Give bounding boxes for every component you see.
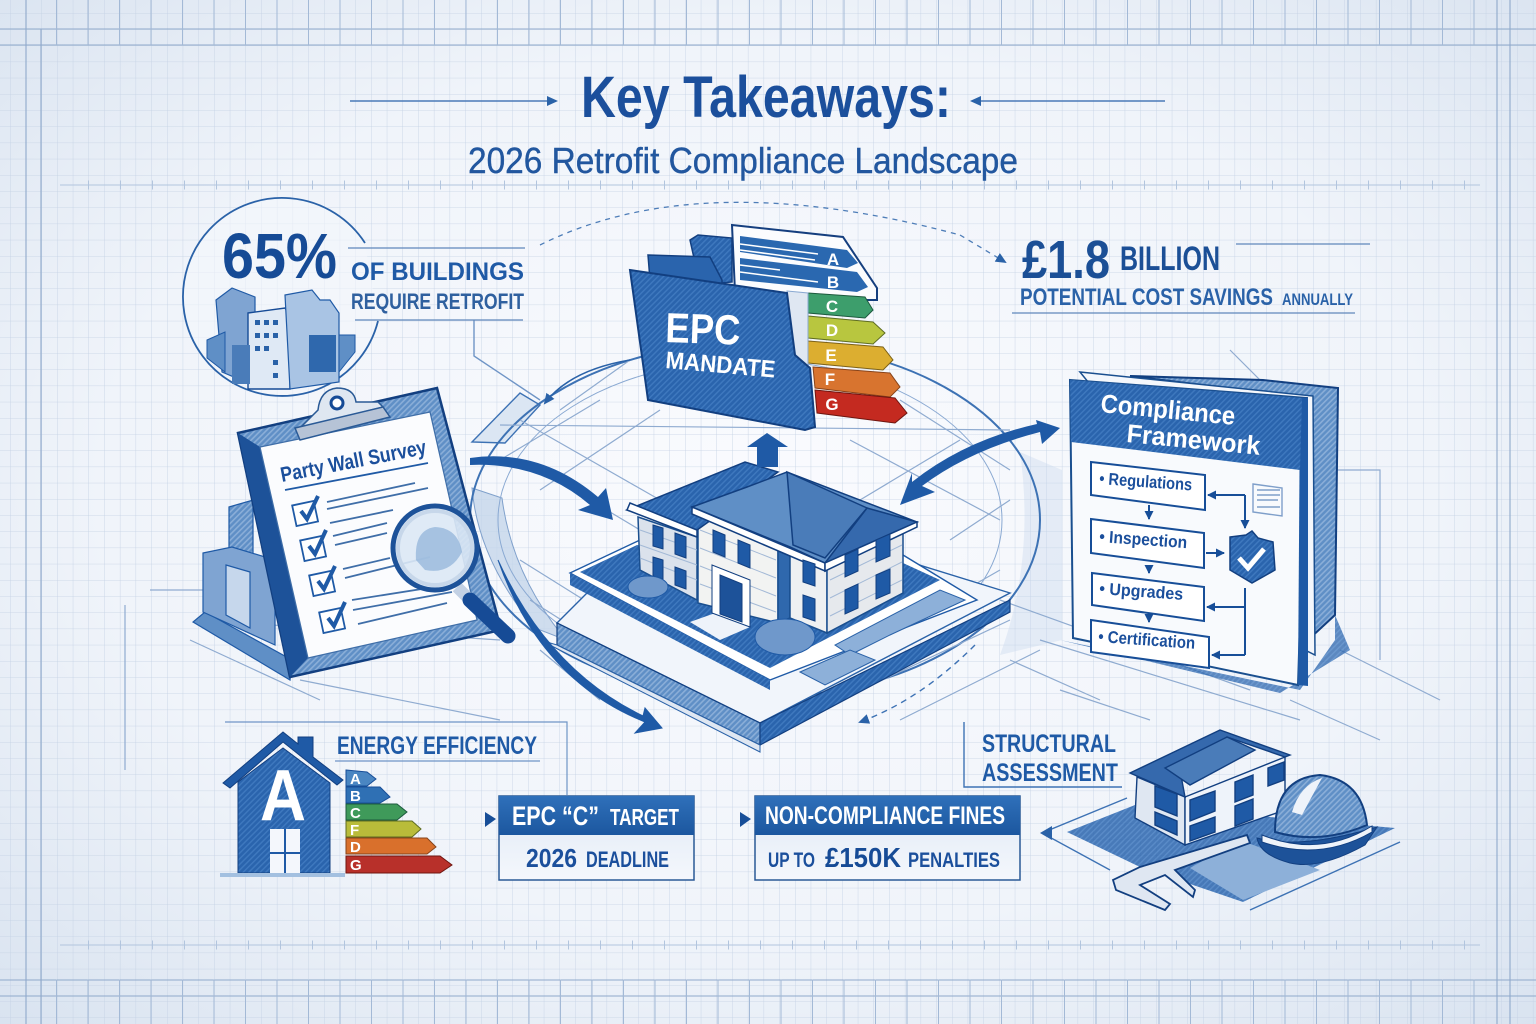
rating arrows A to G: F xyxy=(825,370,835,389)
icon: house rated A xyxy=(220,732,345,875)
clipboard board xyxy=(238,388,501,677)
stat sublabel: REQUIRE RETROFIT xyxy=(351,289,524,314)
target box deadline: 2026 xyxy=(526,843,577,873)
binder header xyxy=(1070,380,1302,470)
fines box amount: UP TO xyxy=(768,849,815,872)
document lines xyxy=(1253,484,1282,516)
process step: Upgrades xyxy=(1092,573,1204,621)
stat label: OF BUILDINGS xyxy=(351,258,524,286)
clipboard heading: Party Wall Survey xyxy=(279,436,428,487)
clipboard paper xyxy=(260,412,477,658)
stat description: POTENTIAL COST SAVINGS xyxy=(1020,284,1273,311)
target box deadline xyxy=(526,843,669,873)
rating sheet xyxy=(732,225,877,300)
fines box amount: £150K xyxy=(825,842,901,873)
binder page edges xyxy=(1080,372,1315,655)
rating arrows A to G: B xyxy=(827,273,839,292)
checklist xyxy=(292,483,452,633)
binder base shadow xyxy=(1060,615,1350,693)
clipboard clip xyxy=(295,388,390,440)
process flow arrows xyxy=(1149,495,1245,655)
rating arrows A to G: E xyxy=(825,346,837,365)
target box pointer xyxy=(485,812,496,827)
fines box header xyxy=(755,796,1020,835)
process step: Upgrades: • Upgrades xyxy=(1099,579,1184,604)
stat qualifier: ANNUALLY xyxy=(1282,290,1354,309)
stat number 65%: 65% xyxy=(222,220,337,292)
arrowhead into plan xyxy=(1040,826,1052,840)
fines box amount: PENALTIES xyxy=(908,849,1000,872)
folder label MANDATE: MANDATE xyxy=(664,347,776,384)
up arrow from house to folder xyxy=(747,433,788,467)
process step: Certification: • Certification xyxy=(1098,627,1196,653)
site plan base xyxy=(1067,805,1395,902)
process step: Regulations xyxy=(1091,462,1205,510)
rating bars A to G: A xyxy=(350,771,361,788)
compliance framework binder xyxy=(1060,372,1350,693)
fines box frame xyxy=(755,796,1020,880)
background plan lines and orbit rings xyxy=(125,202,1440,770)
rating arrows A to G: C xyxy=(826,297,838,316)
process step: Regulations: • Regulations xyxy=(1099,469,1193,494)
target box header xyxy=(499,796,694,835)
binder right strip xyxy=(1298,398,1308,686)
icon: city in a circle xyxy=(183,198,378,396)
EPC mandate folder xyxy=(630,225,907,430)
rating bars A to G: C xyxy=(350,805,361,822)
flow arrows to house xyxy=(470,420,1060,733)
icon: hard hat xyxy=(1257,775,1377,865)
title heading: Key Takeaways: xyxy=(581,65,951,130)
process step: Inspection xyxy=(1091,519,1204,568)
arrow: ring to plot xyxy=(498,560,662,733)
target box heading: TARGET xyxy=(610,804,679,830)
rating arrows A to G: A xyxy=(827,250,839,269)
clipboard front edge xyxy=(238,433,308,677)
structural assessment label: STRUCTURAL xyxy=(982,730,1116,758)
stat: 65% of buildings xyxy=(183,198,525,396)
fines box amount xyxy=(768,842,1000,873)
stat: £1.8 billion savings xyxy=(1012,230,1370,313)
rating bars A to G: B xyxy=(350,788,361,805)
target box frame xyxy=(499,796,694,880)
folder label EPC: EPC xyxy=(665,304,741,354)
icon: magnifying glass xyxy=(393,506,508,636)
arrow: framework to house xyxy=(900,420,1060,505)
background buildings xyxy=(193,500,292,680)
title left arrow xyxy=(350,100,556,102)
structural assessment label xyxy=(982,730,1118,787)
central house on plot xyxy=(540,462,1010,752)
target box deadline: DEADLINE xyxy=(586,847,669,872)
rating bars A to G: F xyxy=(350,822,359,839)
rating arrows A to G: G xyxy=(825,395,839,414)
target box heading xyxy=(512,801,679,831)
folder inner pages xyxy=(787,291,808,368)
ground plate xyxy=(540,540,1010,752)
binder back cover xyxy=(1130,376,1338,640)
binder title line 1: Compliance xyxy=(1099,388,1237,431)
rating arrows A to G: D xyxy=(826,321,838,340)
party wall survey clipboard xyxy=(193,388,508,680)
rating bars A to G: G xyxy=(350,857,362,874)
subtitle: 2026 Retrofit Compliance Landscape xyxy=(468,140,1018,181)
process step: Certification xyxy=(1091,620,1209,668)
binder pages xyxy=(1070,380,1307,685)
stat unit: BILLION xyxy=(1120,240,1220,278)
rating bars A to G: D xyxy=(350,839,361,856)
title right arrow xyxy=(972,100,1165,102)
rating arrows A to G xyxy=(740,236,907,423)
fines box heading: NON-COMPLIANCE FINES xyxy=(765,802,1005,830)
structural assessment panel xyxy=(964,722,1400,910)
building frame model xyxy=(1130,730,1290,845)
house roof xyxy=(627,462,917,571)
arrow: survey to house xyxy=(470,456,613,520)
siding lines xyxy=(640,530,902,616)
stat number £1.8: £1.8 xyxy=(1022,230,1110,290)
rating bars A to G xyxy=(346,770,452,874)
non-compliance fines box xyxy=(740,796,1020,880)
bushes xyxy=(628,576,815,655)
house walls xyxy=(638,513,903,633)
binder title line 2: Framework xyxy=(1125,418,1262,461)
fines box pointer xyxy=(740,812,751,827)
folder front xyxy=(630,270,815,430)
energy efficiency panel xyxy=(220,722,567,875)
energy efficiency label: ENERGY EFFICIENCY xyxy=(337,732,537,760)
EPC C target box xyxy=(485,796,694,880)
icon: caliper tool xyxy=(1113,835,1250,910)
target box heading: EPC “C” xyxy=(512,801,599,831)
house windows and door xyxy=(653,525,890,627)
folder back tabs xyxy=(648,235,732,292)
process step: Inspection: • Inspection xyxy=(1099,527,1188,552)
structural assessment label: ASSESSMENT xyxy=(982,759,1118,787)
icon: check badge xyxy=(1230,531,1275,583)
icon: house rated A: A xyxy=(260,756,306,836)
